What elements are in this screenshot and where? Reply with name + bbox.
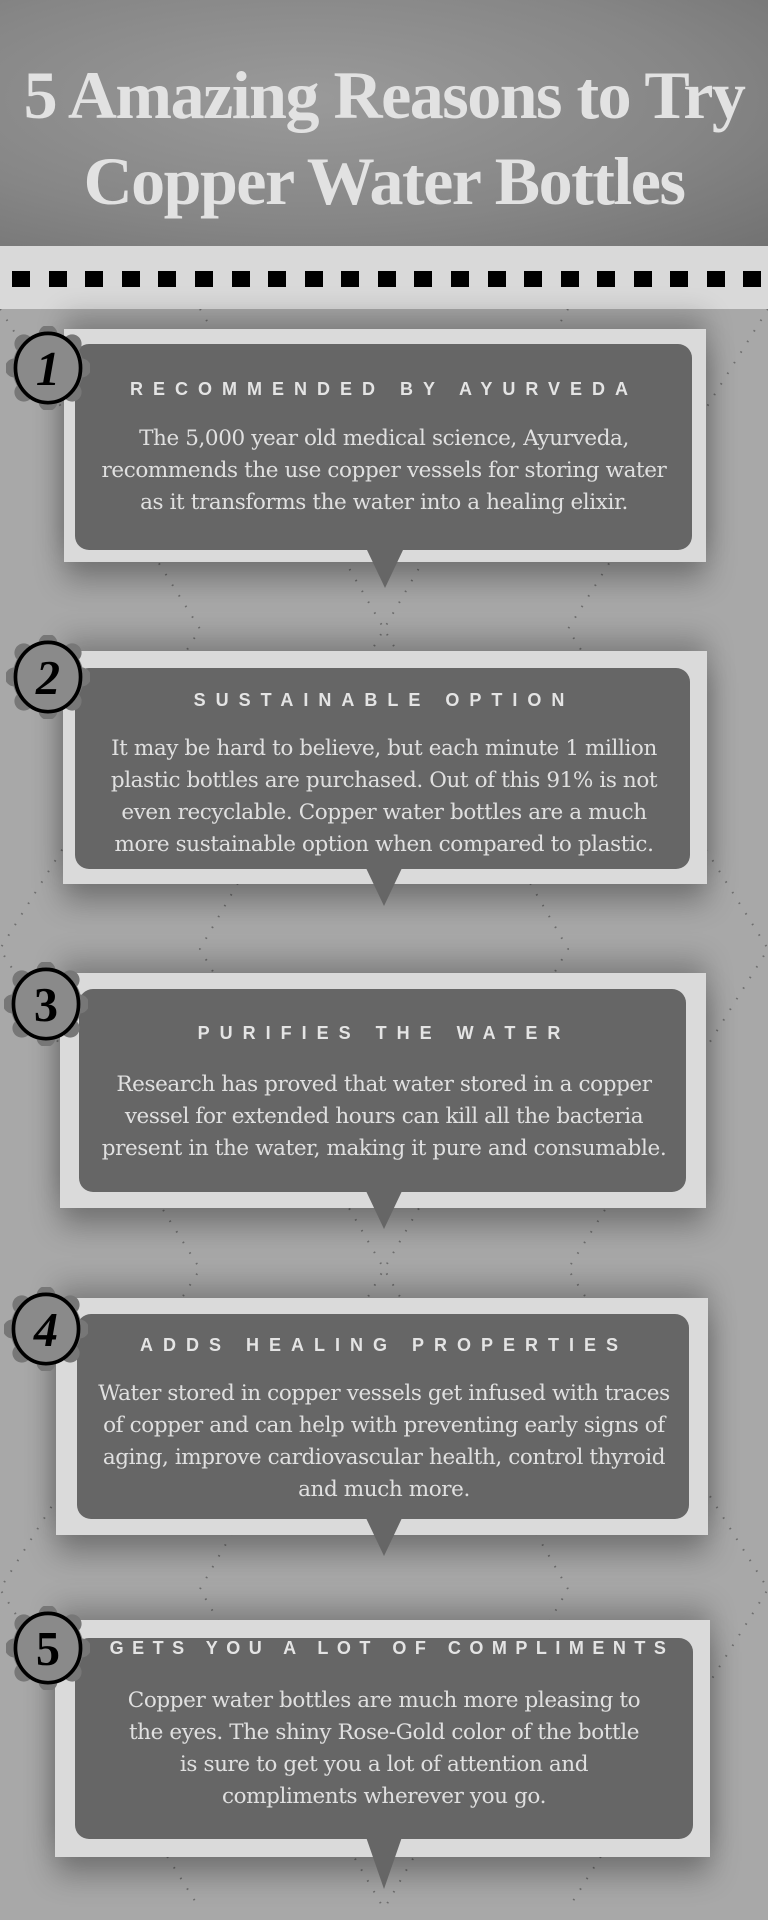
body 3: present in the water, making it pure and consumable. [102, 1136, 666, 1161]
body 4: of copper and can help with preventing early signs of [103, 1413, 665, 1438]
badge 2 [6, 635, 90, 719]
heading 1: RECOMMENDED BY AYURVEDA [130, 379, 638, 399]
badge 2: 2 [35, 652, 60, 705]
body 4 [98, 1381, 670, 1502]
body 2: It may be hard to believe, but each minute 1 million [111, 736, 657, 761]
header [0, 0, 768, 246]
body 3: vessel for extended hours can kill all the bacteria [125, 1104, 643, 1129]
body 1: as it transforms the water into a healing elixir. [140, 490, 628, 515]
body 2: more sustainable option when compared to plastic. [114, 832, 654, 857]
panel 5 [6, 1596, 728, 1889]
title [24, 57, 746, 219]
panel 4 [4, 1274, 726, 1567]
body 5: is sure to get you a lot of attention and [180, 1752, 588, 1777]
title: Copper Water Bottles [84, 143, 684, 219]
body 4: and much more. [298, 1477, 470, 1502]
body 2: plastic bottles are purchased. Out of this 91% is not [111, 768, 657, 793]
body 5 [128, 1688, 640, 1809]
badge 1 [6, 326, 90, 410]
badge 3 [4, 962, 88, 1046]
body 5: Copper water bottles are much more pleasing to [128, 1688, 640, 1713]
body 1: The 5,000 year old medical science, Ayurveda, [139, 426, 629, 451]
body 3: Research has proved that water stored in a copper [116, 1072, 652, 1097]
body 5: the eyes. The shiny Rose-Gold color of the bottle [129, 1720, 639, 1745]
badge 4 [4, 1287, 88, 1371]
heading 3: PURIFIES THE WATER [198, 1023, 570, 1043]
body 2 [111, 736, 658, 857]
body 5: compliments wherever you go. [222, 1784, 546, 1809]
badge 1: 1 [36, 343, 60, 396]
heading 4: ADDS HEALING PROPERTIES [140, 1335, 628, 1355]
panel 2 [6, 627, 726, 916]
body 4: aging, improve cardiovascular health, control thyroid [103, 1445, 665, 1470]
body 2: even recyclable. Copper water bottles are a much [121, 800, 647, 825]
title: 5 Amazing Reasons to Try [24, 57, 744, 133]
heading 2: SUSTAINABLE OPTION [194, 690, 574, 710]
divider strip [0, 246, 768, 309]
body 1: recommends the use copper vessels for storing water [102, 458, 666, 483]
badge 5: 5 [36, 1623, 60, 1676]
body 4: Water stored in copper vessels get infused with traces [98, 1381, 670, 1406]
heading 5: GETS YOU A LOT OF COMPLIMENTS [110, 1638, 674, 1658]
badge 4: 4 [33, 1304, 58, 1357]
badge 5 [6, 1606, 90, 1690]
body 1 [102, 426, 667, 515]
body 3 [102, 1072, 666, 1161]
panel 1 [6, 302, 724, 594]
badge 3: 3 [34, 979, 58, 1032]
panel 3 [4, 949, 724, 1240]
